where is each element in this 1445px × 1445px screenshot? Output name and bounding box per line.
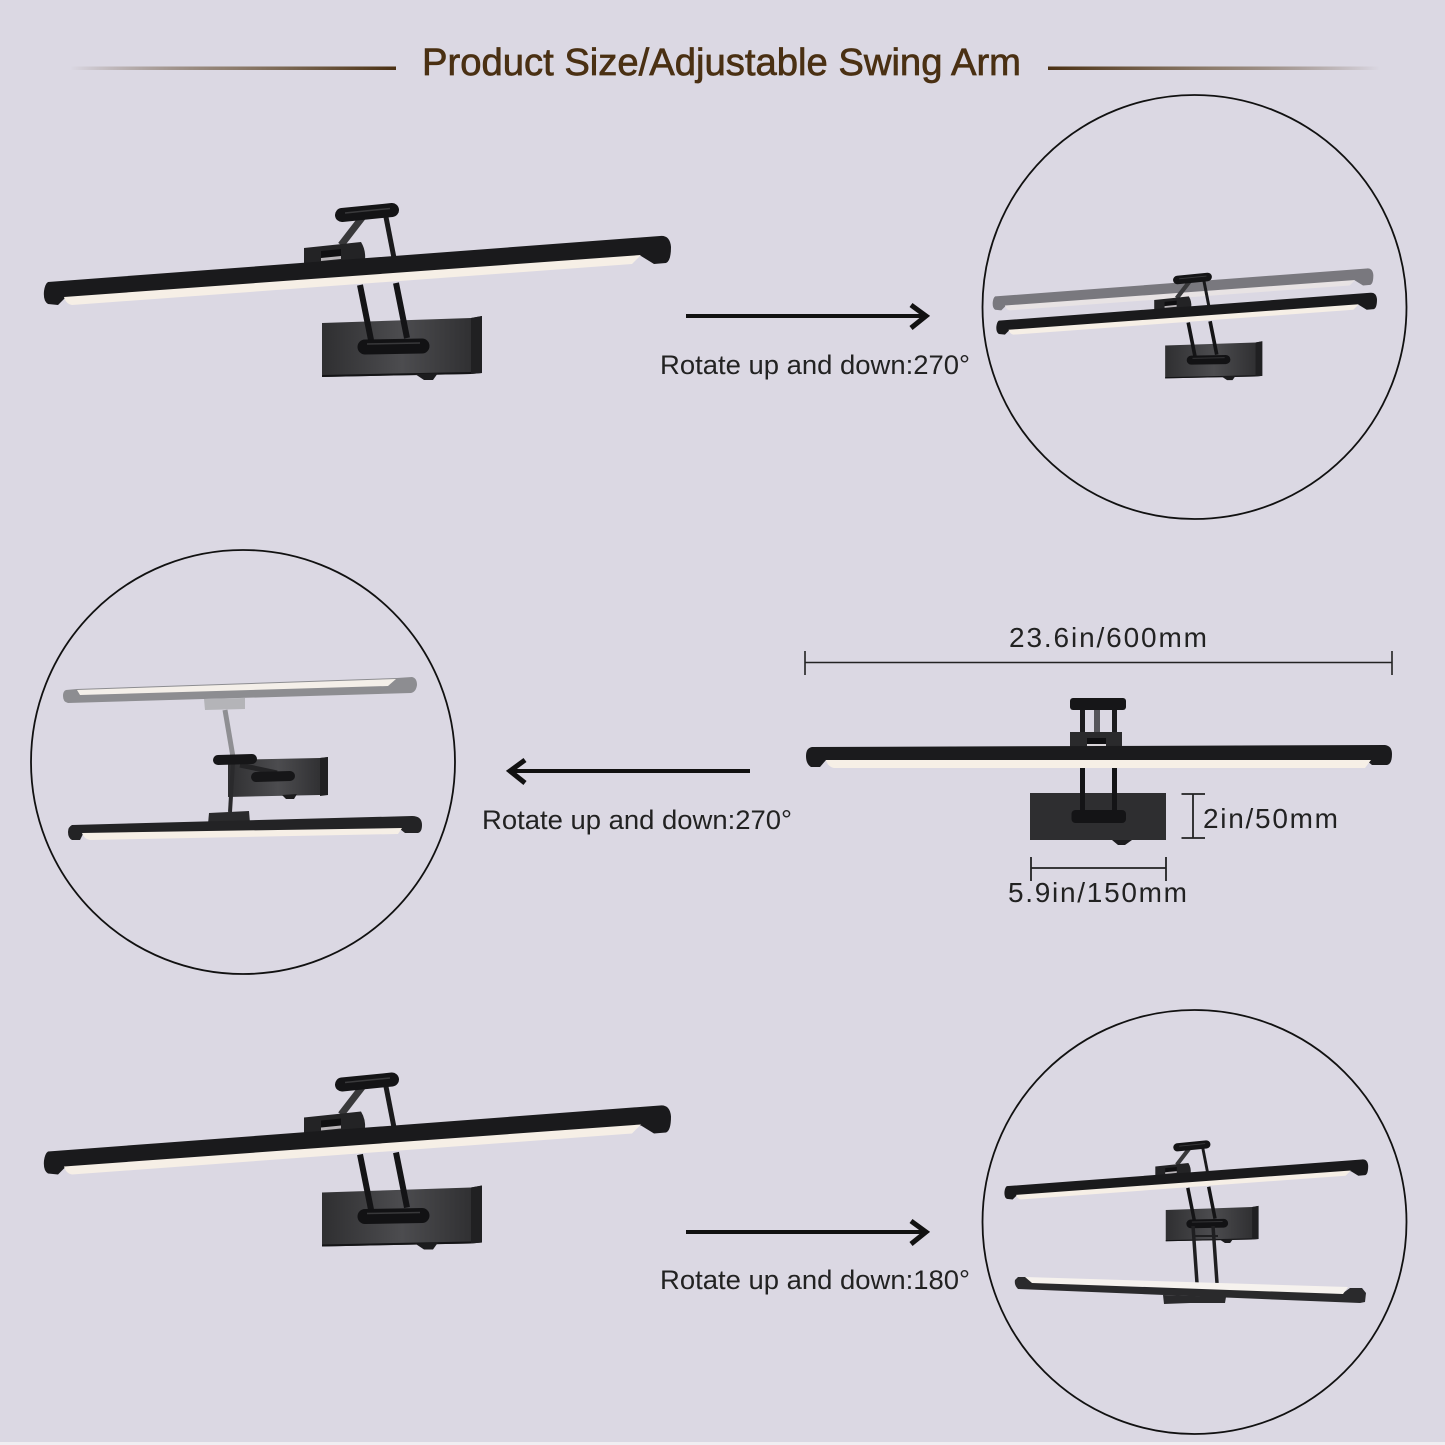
label: rotation bottom row: Rotate up and down:180° — [660, 1265, 970, 1295]
label: rotation middle row: Rotate up and down:270° — [482, 805, 792, 835]
lamp: front view with dimensions — [806, 698, 1392, 845]
arrow: left, middle row — [510, 760, 750, 783]
panel: top circle, raised position — [982, 95, 1406, 519]
dimension line: plate width — [1031, 857, 1166, 881]
lamp: top circle lamp — [996, 276, 1377, 380]
label: width 23.6in: 23.6in/600mm — [1009, 622, 1207, 653]
lamp: bottom circle lower lamp — [1015, 1226, 1366, 1304]
lamp: faded raised bar — [63, 677, 417, 757]
lamp: folded lamp in middle circle — [68, 757, 422, 840]
label: width 5.9in: 5.9in/150mm — [1008, 877, 1187, 908]
title — [70, 42, 1380, 84]
lamp: faded raised bar — [993, 268, 1373, 310]
label: height 2in: 2in/50mm — [1203, 803, 1338, 834]
dimension line: plate height — [1182, 794, 1205, 838]
label: rotation top row: Rotate up and down:270° — [660, 350, 970, 380]
title: Product Size/Adjustable Swing Arm — [422, 42, 1021, 84]
lamp: bottom circle upper lamp — [1004, 1144, 1368, 1243]
lamp: bottom left product — [44, 1078, 671, 1250]
bottom edge strip — [0, 1442, 1445, 1445]
lamp: top left product — [44, 208, 671, 380]
dimension line: overall width — [805, 651, 1392, 675]
arrow: right, bottom row — [686, 1221, 926, 1244]
panel: middle circle, folded position — [31, 550, 455, 974]
arrow: right, top row — [686, 305, 926, 328]
panel: bottom circle — [982, 1010, 1406, 1434]
